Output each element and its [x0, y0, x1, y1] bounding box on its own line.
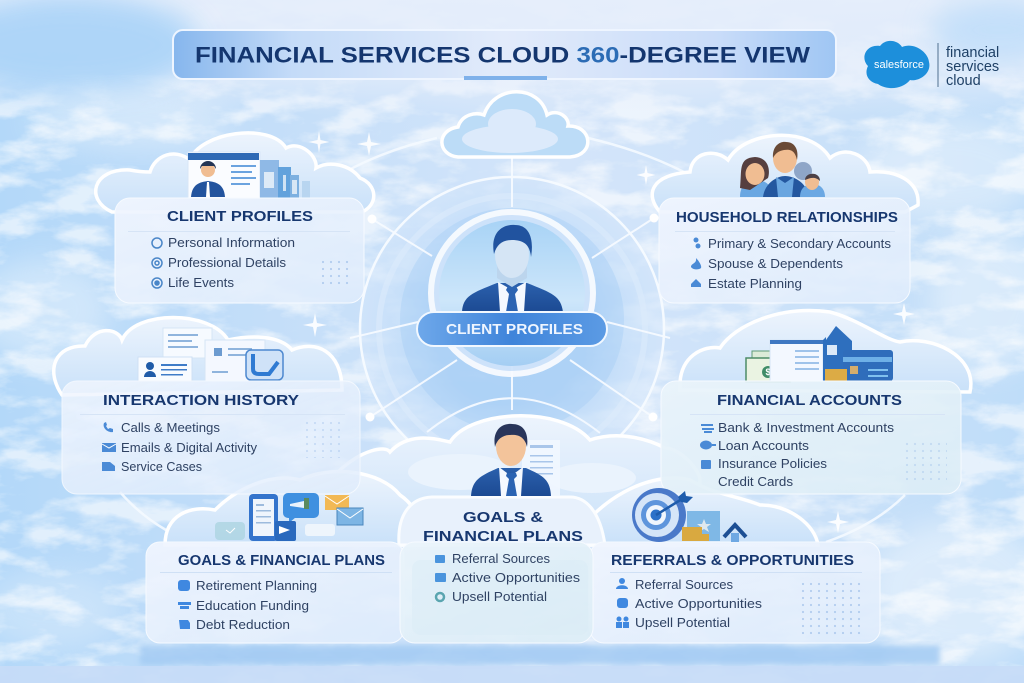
icon: client profile window and buildings [188, 152, 310, 198]
list [452, 551, 581, 604]
list: Spouse & Dependents [708, 256, 844, 271]
panel: financial accounts [661, 381, 961, 494]
panel: interaction history [62, 381, 360, 494]
panel: client profiles [115, 198, 364, 303]
list: Credit Cards [718, 474, 794, 489]
list: Retirement Planning [196, 578, 317, 593]
central hub rings and spokes [303, 131, 915, 533]
heading: GOALS & [463, 510, 544, 526]
list icons [435, 555, 446, 601]
cloud: referrals and opportunities [570, 478, 818, 545]
top cloud [442, 92, 588, 157]
list: Primary & Secondary Accounts [708, 236, 891, 251]
list: Upsell Potential [452, 589, 547, 604]
list icons [102, 422, 116, 471]
list: Estate Planning [708, 276, 802, 291]
heading: FINANCIAL ACCOUNTS [717, 393, 902, 409]
list icons [691, 238, 701, 287]
panel: household relationships [659, 198, 910, 303]
list: Education Funding [196, 598, 309, 613]
list: Service Cases [121, 459, 202, 474]
list [635, 577, 763, 630]
icon: center adviser with document [471, 424, 560, 496]
panel: center goals list [400, 510, 593, 643]
icon: family [740, 142, 825, 197]
list: Referral Sources [452, 551, 550, 566]
heading: HOUSEHOLD RELATIONSHIPS [676, 210, 898, 226]
list: Active Opportunities [635, 596, 763, 611]
cloud: household relationships [652, 135, 918, 212]
cloud: financial accounts [680, 311, 971, 392]
cloud: goals and financial plans [165, 472, 425, 545]
list: Loan Accounts [718, 438, 810, 453]
panel: referrals and opportunities [590, 542, 880, 643]
logo: salesforce financial services cloud [864, 41, 999, 89]
list: Active Opportunities [452, 570, 581, 585]
cloud: interaction history [54, 318, 342, 395]
logo: salesforce financial services cloud: cloud [946, 73, 981, 89]
icon: goals communication devices [215, 493, 363, 541]
cloud: person behind center [340, 416, 700, 545]
goals center header tab [399, 497, 605, 545]
center hub portrait [431, 212, 593, 374]
list: Professional Details [168, 255, 287, 270]
list: Emails & Digital Activity [121, 440, 258, 455]
heading: INTERACTION HISTORY [103, 393, 299, 409]
heading: REFERRALS & OPPORTUNITIES [611, 553, 854, 569]
panel: goals and financial plans [146, 542, 404, 643]
outer connection arcs [120, 138, 905, 542]
cloud: client profiles [96, 133, 374, 212]
heading: FINANCIAL PLANS [423, 529, 583, 545]
icon: financial accounts [746, 326, 893, 382]
list: Debt Reduction [196, 617, 290, 632]
list icons [616, 578, 629, 628]
center hub label: CLIENT PROFILES [446, 321, 583, 338]
logo: salesforce financial services cloud: services [946, 59, 999, 75]
center hub label [417, 312, 607, 346]
list icons [700, 424, 716, 469]
heading: CLIENT PROFILES [167, 209, 313, 225]
list icons [178, 580, 191, 629]
list: Referral Sources [635, 577, 733, 592]
icon: target and growth [632, 488, 746, 542]
title text: FINANCIAL SERVICES CLOUD 360 -DEGREE VIEW [195, 42, 810, 68]
list [196, 578, 317, 632]
list: Upsell Potential [635, 615, 730, 630]
logo: salesforce financial services cloud: financial [946, 45, 999, 61]
list [708, 236, 891, 291]
heading: GOALS & FINANCIAL PLANS [178, 553, 385, 569]
logo: salesforce financial services cloud: salesforce [874, 59, 924, 71]
list: Calls & Meetings [121, 420, 220, 435]
list [168, 235, 295, 290]
list: Life Events [168, 275, 234, 290]
title banner [173, 30, 836, 80]
list: Personal Information [168, 235, 295, 250]
list [121, 420, 258, 474]
list icons [152, 238, 162, 288]
icon: financial accounts: $ [765, 367, 771, 377]
list [718, 420, 895, 489]
list: Insurance Policies [718, 456, 828, 471]
list: Bank & Investment Accounts [718, 420, 895, 435]
icon: interaction documents [138, 328, 283, 381]
